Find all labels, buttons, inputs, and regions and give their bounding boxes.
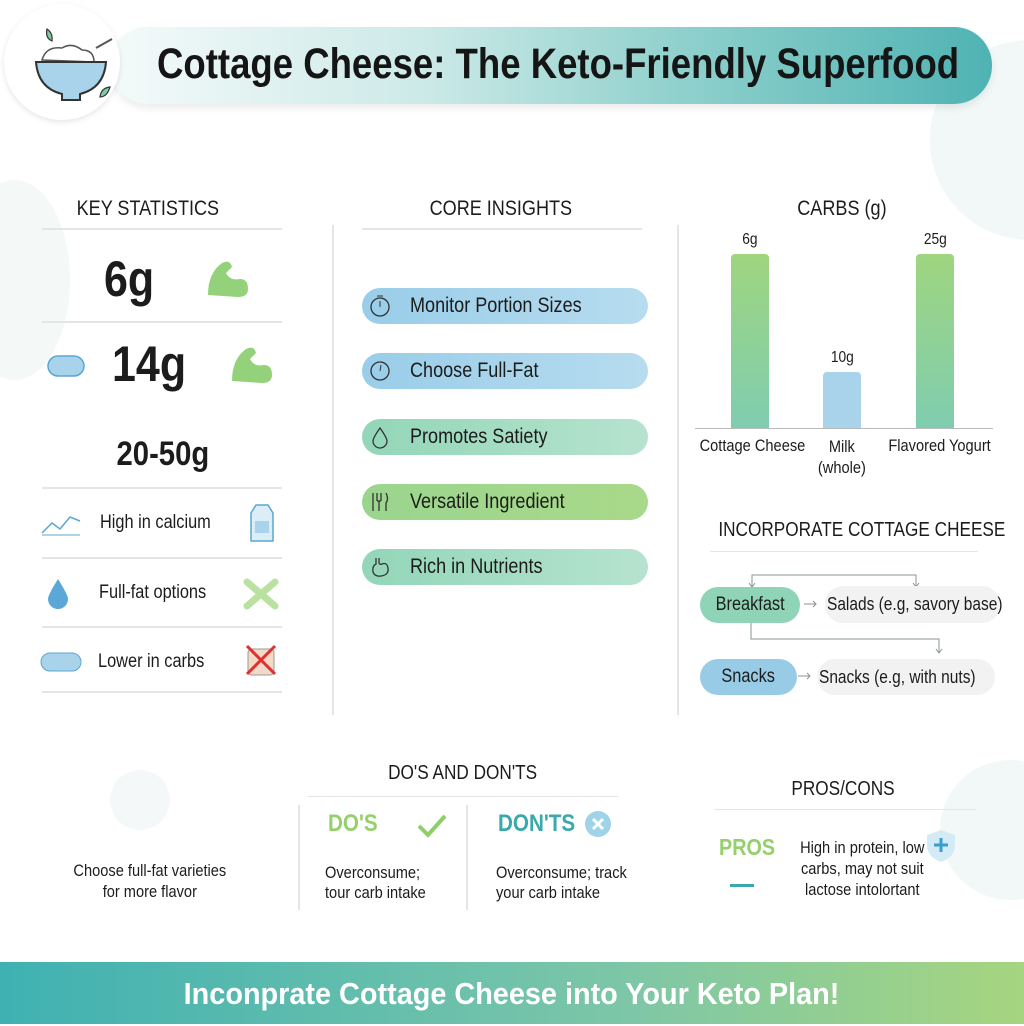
- text: choose full-fat: for more flavor: [103, 882, 197, 901]
- stat 6g: 6g: [104, 251, 154, 307]
- item: lower carbs: Lower in carbs: [98, 651, 204, 672]
- panel: dos and donts: your carb intake: [496, 883, 600, 902]
- axis labels: Cottage Cheese: [699, 436, 805, 455]
- icon: shield: [927, 830, 955, 862]
- pill: versatile: Versatile Ingredient: [410, 490, 565, 513]
- bar: cottage cheese: [731, 254, 769, 428]
- footer banner: Inconprate Cottage Cheese into Your Keto Plan!: [184, 976, 840, 1011]
- panel: pros/cons: [714, 778, 976, 899]
- pill: snacks example: [817, 659, 995, 695]
- panel: dos and donts: [298, 762, 627, 910]
- heading: KEY STATISTICS: [76, 197, 219, 220]
- bar: yogurt: [916, 254, 954, 428]
- panel: carbs chart: (whole): [818, 458, 866, 477]
- text: choose full-fat: [74, 861, 226, 901]
- item: full-fat: [48, 578, 278, 610]
- panel: carbs chart: 6g: [742, 231, 758, 248]
- panel: dos and donts: Overconsume; track: [496, 863, 627, 882]
- panel: dos and donts: tour carb intake: [325, 883, 426, 902]
- item: calcium: [42, 504, 274, 542]
- header bar: [110, 27, 992, 104]
- panel: key statistics: [40, 197, 282, 693]
- panel: carbs chart: Milk: [829, 437, 855, 456]
- pill: snacks: Snacks: [722, 666, 775, 687]
- text: choose full-fat: Choose full-fat varieties: [74, 861, 226, 880]
- item: lower carbs: [40, 645, 276, 676]
- footer banner: [0, 962, 1024, 1024]
- panel: pros/cons: High in protein, low: [800, 838, 924, 857]
- panel: carbs chart: Flavored Yogurt: [889, 436, 991, 455]
- icon: muscle: [208, 262, 248, 297]
- heading: PROS/CONS: [791, 778, 895, 800]
- pill: salads: Salads (e.g, savory base): [827, 594, 1003, 614]
- panel: carbs chart: 25g: [924, 231, 946, 248]
- panel: incorporate: [700, 519, 1005, 695]
- pill: satiety: Promotes Satiety: [410, 425, 548, 448]
- title: Cottage Cheese: The Keto-Friendly Superfood: [157, 40, 959, 88]
- stat 14g: 14g: [112, 336, 186, 392]
- donts: DON'TS: [498, 810, 575, 837]
- panel: carbs chart: 10g: [831, 349, 853, 366]
- stat 20-50g: 20-50g: [116, 435, 209, 473]
- pill: nutrients: Rich in Nutrients: [410, 555, 542, 578]
- dos: DO'S: [328, 810, 378, 837]
- dividers: [332, 225, 334, 715]
- pill: salads: [825, 586, 1000, 623]
- heading: CORE INSIGHTS: [430, 197, 572, 220]
- pros: PROS: [719, 834, 775, 860]
- pill: nutrients: [362, 549, 648, 585]
- pill: snacks example: Snacks (e.g, with nuts): [819, 667, 976, 687]
- pill: monitor: Monitor Portion Sizes: [410, 294, 582, 317]
- pill: versatile: [362, 484, 648, 520]
- pill: snacks: [700, 659, 797, 695]
- icon: bowl: [4, 4, 120, 120]
- heading: DO'S AND DON'TS: [389, 762, 537, 784]
- background circles: [930, 40, 1024, 240]
- pill: breakfast: Breakfast: [715, 594, 785, 615]
- panel: pros/cons: lactose intolortant: [805, 880, 919, 899]
- pill: breakfast: [700, 587, 800, 623]
- panel: carbs chart: [695, 197, 993, 477]
- bar: milk: [823, 372, 861, 428]
- panel: dos and donts: Overconsume;: [325, 863, 420, 882]
- flow arrows: [748, 574, 942, 680]
- heading: CARBS (g): [797, 197, 887, 220]
- panel: pros/cons: carbs, may not suit: [801, 859, 923, 878]
- heading: INCORPORATE COTTAGE CHEESE: [718, 519, 1005, 541]
- item: full-fat: Full-fat options: [99, 582, 206, 603]
- pill: full-fat: Choose Full-Fat: [410, 359, 538, 382]
- pill: monitor: [362, 288, 648, 324]
- item: calcium: High in calcium: [100, 512, 211, 533]
- pill: satiety: [362, 419, 648, 455]
- pill: full-fat: [362, 353, 648, 389]
- icon: bread: [47, 355, 85, 377]
